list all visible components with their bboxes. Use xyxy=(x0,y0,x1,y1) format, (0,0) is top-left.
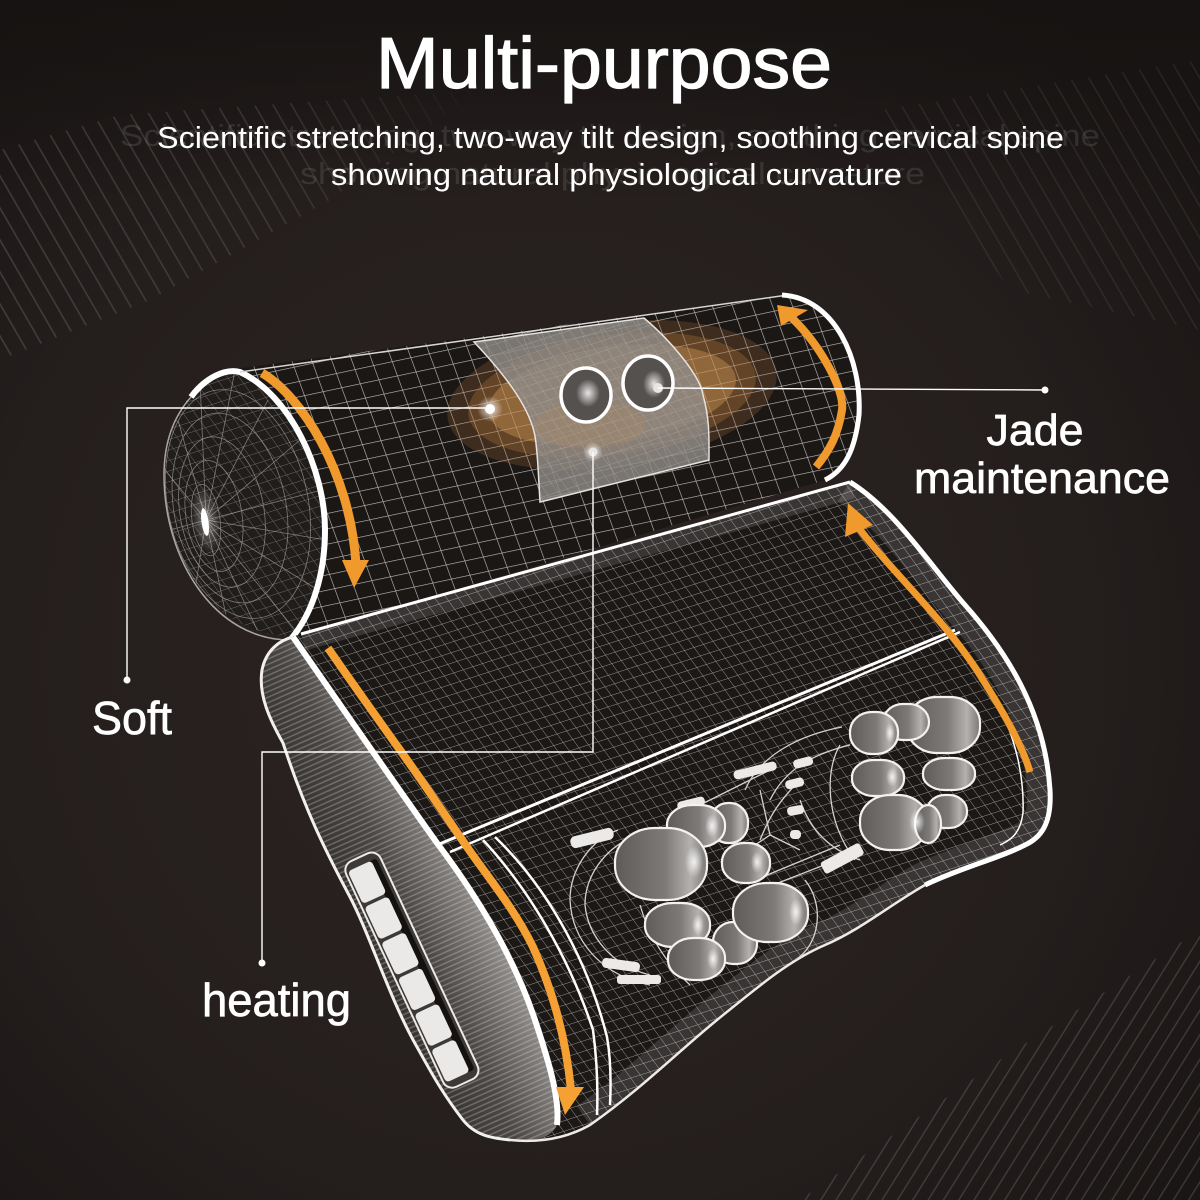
translucent jade panel xyxy=(474,318,709,502)
top roll pillow xyxy=(163,292,862,640)
massage rollers xyxy=(615,697,980,980)
callout line: heating xyxy=(258,452,593,966)
lower pillow base xyxy=(250,470,1060,1150)
ghost subtitle xyxy=(120,118,1100,191)
massage mechanism frame xyxy=(569,727,865,985)
label: jade maintenance xyxy=(914,406,1170,503)
title: Multi-purpose xyxy=(376,24,832,104)
subtitle: Scientific stretching, two-way tilt design, soothing cervical spine xyxy=(157,120,1064,155)
outline xyxy=(301,482,850,634)
ghost subtitle: showing natural physiological curvature xyxy=(300,156,925,191)
side face xyxy=(262,639,557,1140)
label: jade maintenance: Jade xyxy=(986,406,1084,455)
jade stones xyxy=(477,356,673,462)
arrow: top roll right xyxy=(777,305,842,467)
label: heating: heating xyxy=(202,974,351,1026)
arrow: base right xyxy=(845,503,1030,772)
arrow: top roll left xyxy=(262,373,369,588)
heat glow rings xyxy=(447,320,777,468)
callout line: jade maintenance xyxy=(658,386,1048,394)
callout line: soft xyxy=(124,408,490,684)
label: jade maintenance: maintenance xyxy=(914,454,1170,503)
roll outlines xyxy=(191,371,325,640)
subtitle xyxy=(157,120,1064,192)
arrow: base left xyxy=(328,648,584,1115)
roll end cap xyxy=(164,371,325,640)
label: soft: Soft xyxy=(92,692,172,744)
subtitle: showing natural physiological curvature xyxy=(331,157,902,192)
ghost subtitle: Scientific stretching, two-way tilt design, soothing cervical spine xyxy=(120,118,1100,153)
control buttons xyxy=(342,849,482,1091)
